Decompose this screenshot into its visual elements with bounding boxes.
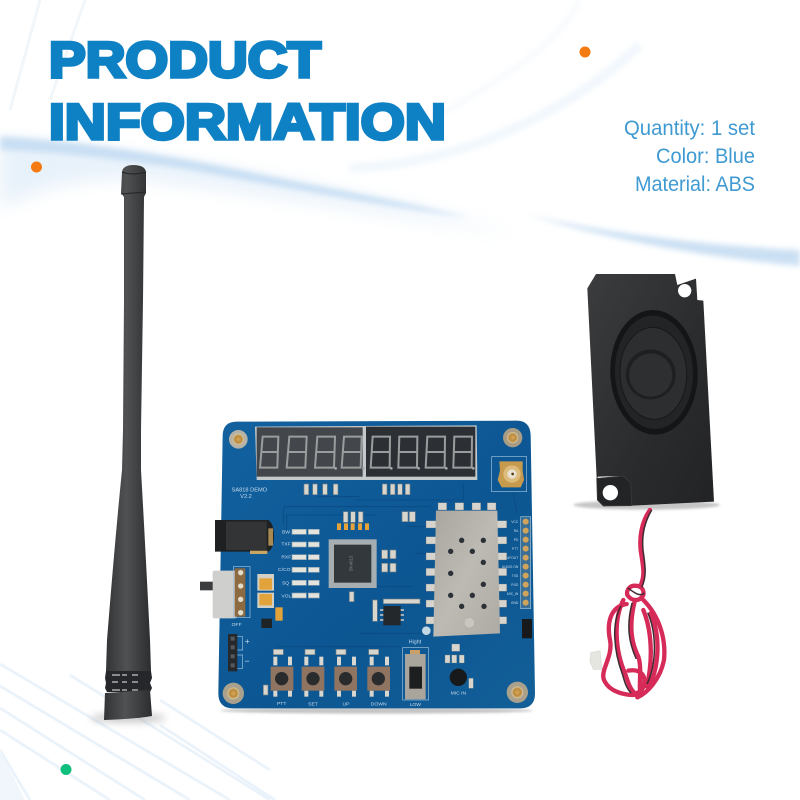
battery pin header [228, 634, 250, 671]
battery pin header: − [244, 656, 250, 666]
product specifications text: Color: Blue [656, 145, 755, 168]
pin header right: RXD [511, 583, 519, 587]
led indicator rows: BW [282, 529, 290, 535]
title [49, 32, 446, 150]
pin header right: MIC_IN [507, 592, 519, 596]
pin header right: RA [514, 529, 519, 533]
circuit board [200, 421, 535, 714]
sa818 shield module [422, 503, 507, 637]
product specifications text: Quantity: 1 set [624, 117, 755, 140]
speaker body [587, 274, 714, 506]
microphone [445, 644, 473, 697]
sma antenna connector [492, 457, 527, 492]
audio amplifier chip [380, 606, 404, 625]
tactile buttons: PTT [277, 701, 286, 707]
tactile buttons: UP [343, 702, 350, 708]
speaker cone [608, 308, 700, 436]
pin header right: PTT [512, 547, 518, 551]
pin header right: GND [511, 601, 519, 605]
main microcontroller chip: BK4815 [349, 555, 354, 571]
orange dot top right [580, 46, 590, 58]
led indicator rows: SQ [282, 580, 289, 586]
mounting screws [223, 428, 528, 704]
power level slide switch: LOW [410, 702, 421, 708]
tactile buttons [271, 649, 390, 708]
product specifications text: Material: ABS [635, 173, 755, 196]
board name text: SA818 DEMO [232, 488, 268, 494]
led indicator rows [278, 529, 319, 599]
small smd parts top [263, 484, 420, 695]
title: INFORMATION [49, 94, 446, 150]
pin header right [502, 517, 532, 638]
antenna [90, 165, 166, 722]
power slide switch: OFF [232, 622, 242, 628]
microphone: MIC IN [451, 691, 466, 697]
tactile buttons: DOWN [371, 702, 387, 708]
orange capacitors row [337, 523, 369, 530]
power level slide switch: Hight [409, 640, 422, 646]
led indicator rows: C/CO [278, 567, 291, 573]
led indicator rows: RXF [281, 554, 291, 560]
traces [277, 483, 517, 647]
pin header right: TXD [512, 574, 519, 578]
title: PRODUCT [49, 32, 321, 88]
tantalum capacitors [257, 574, 283, 628]
pin header right: AUDIO ON [502, 565, 519, 569]
led indicator rows: VOL [281, 593, 292, 599]
seven-segment display [255, 425, 477, 480]
green dot [60, 764, 72, 775]
pin header right: AFOUT [507, 556, 518, 560]
main microcontroller chip [329, 539, 377, 588]
power slide switch [200, 567, 250, 628]
pin header right: PD [514, 538, 519, 542]
board name text [232, 488, 268, 500]
led indicator rows: TXF [281, 542, 291, 548]
orange dot left [31, 162, 42, 172]
board name text: V2.2 [240, 494, 252, 500]
product specifications text [624, 117, 755, 196]
battery pin header: + [245, 636, 250, 646]
speaker mounting tabs [597, 284, 691, 506]
tactile buttons: SET [308, 702, 318, 708]
pcb base [218, 421, 535, 708]
cable bundle [590, 510, 664, 697]
pin header right: VCC [511, 520, 519, 524]
speaker with cable [573, 274, 720, 697]
dc power jack [215, 520, 274, 554]
power level slide switch [403, 640, 429, 708]
